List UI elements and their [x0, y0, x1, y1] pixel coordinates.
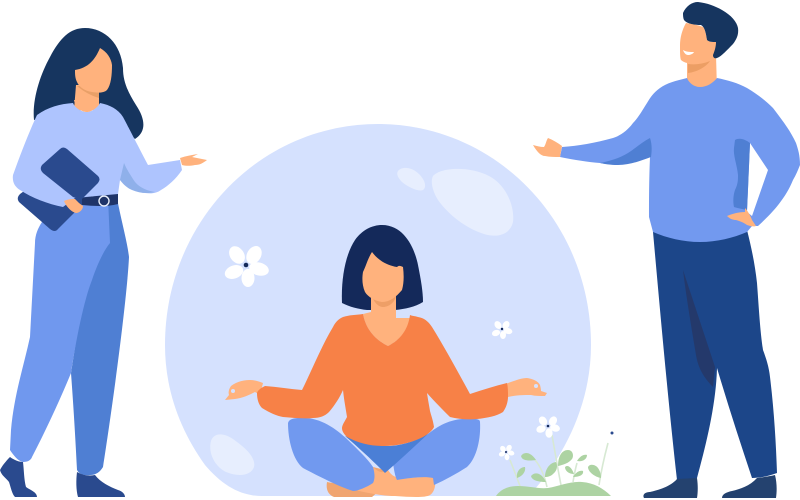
open hand [180, 154, 207, 166]
gap between arm and body [747, 143, 768, 216]
trousers back leg [71, 198, 129, 475]
neck and face [362, 252, 410, 346]
neck collar [74, 100, 99, 112]
long hair [34, 28, 143, 139]
sleeve shadow [120, 163, 155, 193]
plants and ground mound [496, 435, 611, 496]
shorts [345, 433, 429, 473]
left hand [225, 380, 263, 400]
sleeve and side shadows [600, 138, 750, 210]
man talking [533, 2, 800, 498]
blue sweater [560, 78, 800, 242]
neck and face [680, 23, 717, 90]
neck and face [74, 48, 112, 110]
right hand [505, 378, 547, 397]
flower: large white [223, 243, 270, 287]
crossed legs [288, 418, 480, 491]
trouser shadow [683, 270, 715, 387]
light blue sweater [13, 103, 182, 207]
woman with clipboard [0, 28, 207, 497]
open hand [533, 138, 562, 157]
clipboard front [41, 148, 100, 200]
flower: small white in bubble [491, 320, 513, 339]
hand on clipboard [64, 199, 83, 213]
trousers front leg [10, 198, 110, 462]
orange sweater [257, 314, 508, 446]
flower bud dot [610, 432, 614, 434]
bubble [165, 124, 591, 496]
flower: plant flower large [535, 415, 561, 438]
hair [683, 2, 738, 58]
feet [327, 467, 435, 497]
hand on hip [727, 208, 756, 226]
hair [342, 225, 423, 310]
clipboard back [18, 164, 93, 231]
shoes [643, 475, 777, 498]
shoes [0, 457, 125, 497]
belt with buckle [82, 192, 118, 206]
flower: plant flower small [498, 444, 515, 460]
trousers [653, 230, 777, 480]
meditating woman [225, 225, 547, 497]
